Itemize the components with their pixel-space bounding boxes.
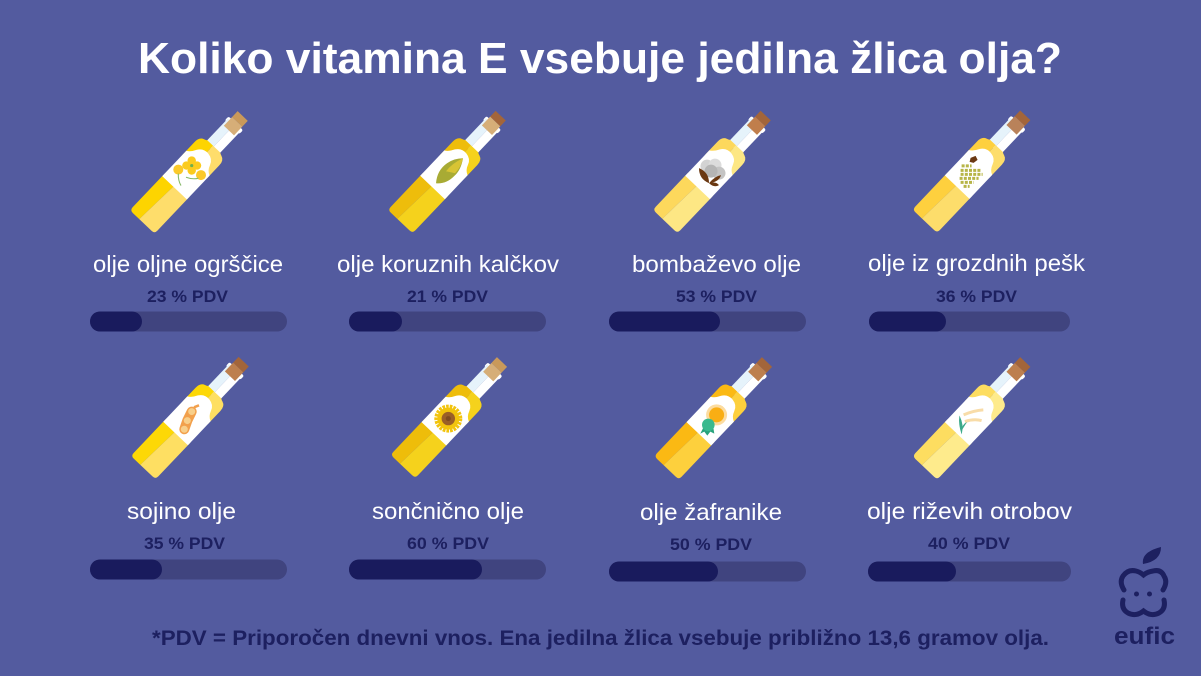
name: olje oljne ogrščice xyxy=(93,251,283,277)
footnote: *PDV = Priporočen dnevni vnos. Ena jedilna žlica vsebuje približno 13,6 gramov olja. xyxy=(152,627,1049,650)
value: 50 % PDV xyxy=(670,535,753,554)
bar xyxy=(609,312,806,332)
name: olje iz grozdnih pešk xyxy=(868,250,1086,276)
bar xyxy=(609,562,806,582)
value: 40 % PDV xyxy=(928,534,1011,553)
logo: eufic xyxy=(1114,547,1175,650)
bar xyxy=(90,560,287,580)
bottle: sončnično olje xyxy=(391,350,514,478)
wordmark: eufic xyxy=(1114,623,1175,650)
bar xyxy=(349,560,546,580)
bar xyxy=(90,312,287,332)
item: olje žafranike xyxy=(609,349,806,582)
bar xyxy=(869,312,1070,332)
icon: apple face xyxy=(1121,547,1166,615)
bottle: bombaževo olje xyxy=(652,103,780,235)
bottle: olje žafranike xyxy=(653,349,783,483)
value: 53 % PDV xyxy=(676,287,758,306)
item: bombaževo olje xyxy=(609,103,806,332)
name: olje riževih otrobov xyxy=(867,498,1073,524)
item: olje koruznih kalčkov xyxy=(337,104,560,332)
bottle: olje oljne ogrščice xyxy=(126,100,258,237)
item: olje riževih otrobov xyxy=(867,350,1073,582)
bottle: sojino olje xyxy=(131,350,256,479)
bar xyxy=(349,312,546,332)
name: olje žafranike xyxy=(640,499,782,525)
bottle: olje iz grozdnih pešk xyxy=(910,102,1038,234)
value: 36 % PDV xyxy=(936,287,1018,306)
value: 23 % PDV xyxy=(147,287,229,306)
item: sojino olje xyxy=(90,350,287,580)
name: bombaževo olje xyxy=(632,251,801,277)
value: 35 % PDV xyxy=(144,534,226,553)
item: sončnično olje xyxy=(349,350,546,580)
name: sojino olje xyxy=(127,498,236,524)
bottle: olje riževih otrobov xyxy=(912,350,1039,481)
bar xyxy=(868,562,1071,582)
value: 60 % PDV xyxy=(407,534,490,553)
item: olje iz grozdnih pešk xyxy=(868,102,1086,332)
value: 21 % PDV xyxy=(407,287,489,306)
title: Koliko vitamina E vsebuje jedilna žlica olja? xyxy=(138,34,1062,83)
item: olje oljne ogrščice xyxy=(90,100,287,332)
name: sončnično olje xyxy=(372,498,524,524)
bottle: olje koruznih kalčkov xyxy=(387,104,515,235)
name: olje koruznih kalčkov xyxy=(337,251,560,277)
